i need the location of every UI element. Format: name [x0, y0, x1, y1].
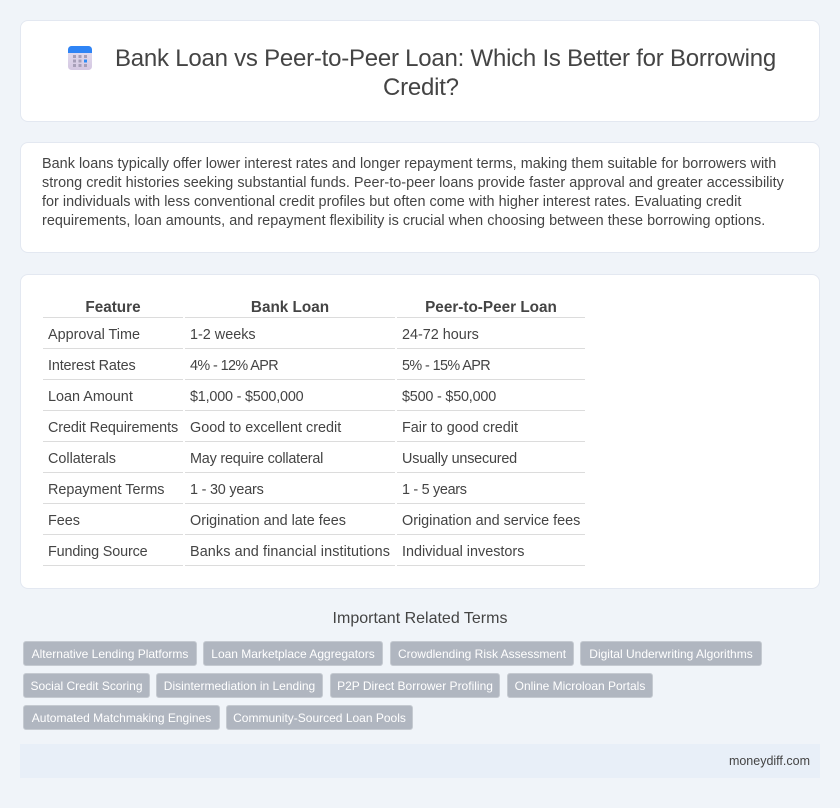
comparison table: Origination and service fees	[402, 513, 580, 529]
comparison table panel	[20, 274, 820, 589]
comparison table: 1-2 weeks	[190, 327, 256, 343]
icon: calendar	[68, 46, 92, 70]
comparison table: 1 - 5 years	[402, 482, 467, 498]
comparison table: Approval Time	[48, 327, 140, 343]
comparison table: 24-72 hours	[402, 327, 479, 343]
comparison table: May require collateral	[190, 451, 323, 467]
related terms tags: Alternative Lending Platforms	[32, 647, 188, 661]
intro panel	[20, 142, 820, 253]
related terms tags: Online Microloan Portals	[515, 679, 645, 693]
footer: moneydiff.com	[729, 754, 810, 768]
comparison table: Loan Amount	[48, 389, 133, 405]
title	[115, 45, 776, 101]
related terms tags: Crowdlending Risk Assessment	[398, 647, 566, 661]
comparison table: Collaterals	[48, 451, 116, 467]
comparison table: 4% - 12% APR	[190, 358, 278, 374]
intro text: Bank loans typically offer lower interest rates and longer repayment terms, making them suitable for borrowers with	[42, 156, 776, 172]
related terms heading: Important Related Terms	[333, 610, 507, 627]
comparison table: Origination and late fees	[190, 513, 346, 529]
comparison table: Bank Loan	[251, 299, 329, 316]
comparison table: Fees	[48, 513, 80, 529]
title: Credit?	[383, 74, 459, 101]
comparison table: 1 - 30 years	[190, 482, 264, 498]
comparison table: Fair to good credit	[402, 420, 518, 436]
comparison table: Good to excellent credit	[190, 420, 341, 436]
intro text: requirements, loan amounts, and repayment flexibility is crucial when choosing between these borrowing options.	[42, 213, 765, 229]
comparison table: Peer-to-Peer Loan	[425, 299, 557, 316]
comparison table: Usually unsecured	[402, 451, 517, 467]
related terms tags: Loan Marketplace Aggregators	[211, 647, 375, 661]
intro text	[42, 156, 784, 229]
comparison table: Repayment Terms	[48, 482, 165, 498]
comparison table: $500 - $50,000	[402, 389, 496, 405]
related terms tags	[23, 641, 762, 730]
comparison table	[43, 299, 585, 566]
related terms tags: Automated Matchmaking Engines	[32, 711, 211, 725]
comparison table: Feature	[85, 299, 141, 316]
related terms tags: Digital Underwriting Algorithms	[589, 647, 753, 661]
intro text: for individuals with less conventional credit profiles but often come with higher interest rates. Evaluating credit	[42, 194, 741, 210]
comparison table: Interest Rates	[48, 358, 135, 374]
comparison table: Individual investors	[402, 544, 524, 560]
comparison table: 5% - 15% APR	[402, 358, 490, 374]
comparison table: $1,000 - $500,000	[190, 389, 303, 405]
comparison table: Banks and financial institutions	[190, 544, 390, 560]
title: Bank Loan vs Peer-to-Peer Loan: Which Is Better for Borrowing	[115, 45, 776, 72]
related terms tags: Community-Sourced Loan Pools	[233, 711, 406, 725]
related terms tags: Disintermediation in Lending	[164, 679, 315, 693]
related terms tags: P2P Direct Borrower Profiling	[337, 679, 493, 693]
footer	[20, 744, 820, 778]
comparison table: Funding Source	[48, 544, 148, 560]
header panel	[20, 20, 820, 122]
related terms tags: Social Credit Scoring	[30, 679, 143, 693]
intro text: strong credit histories seeking substantial funds. Peer-to-peer loans provide faster approval and greater accessibility	[42, 175, 784, 191]
comparison table: Credit Requirements	[48, 420, 178, 436]
